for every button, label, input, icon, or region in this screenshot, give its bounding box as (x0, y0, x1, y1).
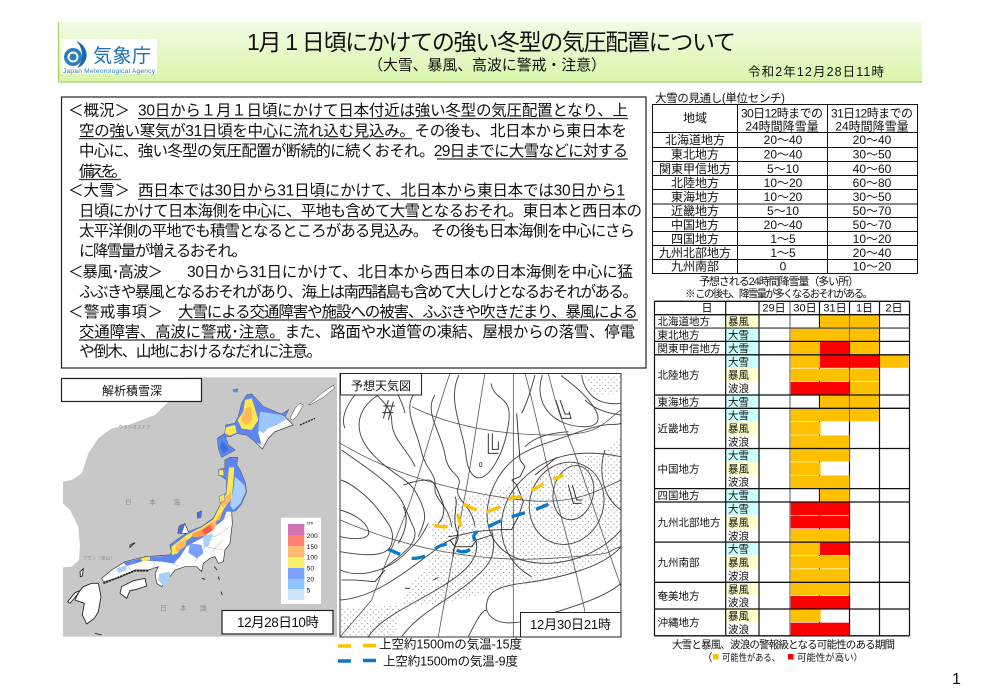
text block: overview: 備えを。 (79, 162, 127, 180)
warning type labels: 暴風 (728, 557, 749, 569)
table rows: 四国地方 (671, 231, 719, 246)
warning type labels: 暴風 (728, 517, 749, 529)
region labels: 奄美地方 (658, 590, 700, 602)
text block: warnings: ＜警戒事項＞ (68, 303, 163, 321)
table note: ※ この後も、降雪量が多くなるおそれがある。 (685, 287, 873, 300)
chart: coastlines (342, 413, 557, 588)
text block: warnings: や倒木、山地におけるなだれに注意。 (79, 342, 322, 360)
table rows: 北陸地方 (671, 175, 719, 190)
text block: heavy snow (68, 182, 642, 260)
map label: analysed snow depth: 解析積雪深 (102, 383, 162, 398)
map legend: 50 (307, 565, 314, 572)
region labels: 東海地方 (658, 395, 700, 408)
table header dates: 30日 (793, 302, 817, 314)
warning type labels: 大雪 (728, 449, 749, 462)
table rows: 近畿地方 (671, 203, 719, 218)
chart: isobars (340, 375, 621, 637)
table rows: 東海地方 (671, 189, 719, 204)
map: labels: 日本国 (160, 604, 207, 613)
warning type labels: 波浪 (728, 569, 749, 582)
warning type labels: 大雪 (728, 355, 749, 368)
title: 1月 1 日頃にかけての強い冬型の気圧配置について (247, 29, 736, 55)
table rows: 中国地方 (671, 217, 719, 232)
chart label: forecast weather map (340, 374, 422, 395)
panel: snowfall forecast table (652, 91, 918, 300)
map: continent (63, 377, 185, 482)
region labels: 東北地方 (658, 328, 700, 342)
table rows: 50～70 (853, 204, 892, 218)
table rows: 5～10 (767, 204, 799, 218)
warning type labels: 波浪 (728, 623, 749, 636)
date: 令和2年12月28日11時 (748, 65, 884, 79)
chart label: forecast weather map: 予想天気図 (351, 378, 411, 393)
warning type labels: 波浪 (728, 596, 749, 609)
header band (58, 22, 922, 82)
map: Shikoku and Kyushu (68, 543, 222, 635)
map legend: 5 (307, 587, 311, 594)
warning type labels: 大雪 (728, 543, 749, 556)
table rows: 60～80 (853, 176, 892, 190)
table rows: 5～10 (767, 162, 799, 176)
text block: heavy snow: 日頃にかけて日本海側を中心に、平地も含めて大雪となるおそれ。東日本と西日本の (79, 202, 642, 220)
table caption: 大雪と暴風、波浪の警報級となる可能性のある期間 (672, 638, 895, 651)
warning type labels: 大雪 (728, 502, 749, 516)
table note: 予想される24時間降雪量（多い所） (699, 274, 859, 288)
table rows: 1～5 (770, 246, 796, 260)
table rows: 50～70 (853, 218, 892, 232)
legend: -15 degree line: 上空約1500mの気温-15度 (379, 636, 522, 652)
table caption: 可能性が高い） (797, 652, 863, 664)
warning type labels: 大雪 (728, 342, 749, 355)
table header (683, 106, 913, 134)
warning type labels: 大雪 (728, 328, 749, 342)
table caption: （ (702, 652, 712, 664)
warning type labels: 暴風 (728, 316, 749, 328)
chart timestamp: 12月30日21時 (530, 617, 611, 632)
region labels: 四国地方 (658, 489, 700, 502)
table caption (672, 638, 895, 664)
map: Hokkaido (218, 385, 334, 457)
region labels: 近畿地方 (658, 422, 700, 435)
panel: snow depth map (62, 377, 337, 637)
chart timestamp (520, 612, 621, 637)
text block: heavy snow: に降雪量が増えるおそれ。 (79, 242, 247, 260)
text block: storm and high waves: 30日から31日にかけて、北日本から西日本の日本海側を中心に猛 (187, 263, 633, 281)
map legend: cm (307, 520, 313, 526)
warning type labels (728, 316, 749, 636)
text block: overview: 空の強い寒気が31日頃を中心に流れ込む見込み。その後も、北日本から東日本を (79, 122, 627, 140)
table header dates: 29日 (762, 302, 786, 314)
text block: overview: 30日から１月１日頃にかけて日本付近は強い冬型の気圧配置となり、上 (138, 102, 628, 120)
table header: 31日12時までの (831, 106, 913, 120)
warning type labels: 暴風 (728, 423, 749, 435)
map timestamp (222, 610, 333, 634)
map legend (281, 518, 321, 604)
text block: overview: 中心に、強い冬型の気圧配置が断続的に続くおそれ。29日までに大雪などに対する (79, 142, 628, 160)
map: labels: プサン（釜山） (82, 554, 115, 561)
warning type labels: 暴風 (728, 370, 749, 382)
map timestamp: 12月28日10時 (237, 615, 320, 630)
text block: heavy snow: 太平洋側の平地でも積雪となるところがある見込み。 その後も日本海側を中心にさら (79, 222, 635, 240)
warning type labels: 波浪 (728, 436, 749, 449)
map legend: 100 (307, 555, 318, 562)
map: labels: 日本海 (125, 498, 180, 507)
map label: analysed snow depth (62, 378, 202, 402)
region labels: 九州北部地方 (658, 516, 720, 529)
map legend: 150 (307, 544, 318, 551)
table rows: 20～40 (764, 148, 803, 162)
text block: storm and high waves: ＜暴風･高波＞ (68, 263, 163, 281)
map: Honshu (102, 457, 247, 587)
chart: -9C line blue (388, 504, 548, 558)
warning type labels: 暴風 (728, 584, 749, 596)
table rows: 九州南部 (671, 259, 719, 274)
table header dates (702, 302, 903, 314)
logo: Japan Meteorological Agency: Japan Meteorological Agency (63, 68, 156, 75)
table rows: 20～40 (853, 246, 892, 260)
logo: Japan Meteorological Agency: 気象庁 (93, 45, 151, 67)
table rows: 20～40 (764, 133, 803, 147)
text block: storm and high waves: ふぶきや暴風となるおそれがあり、海上は南西諸島も含めて大しけとなるおそれがある。 (79, 283, 638, 301)
table caption: 可能性がある、 (722, 652, 780, 664)
table rows (659, 132, 892, 274)
text block: storm and high waves (68, 263, 638, 301)
warning type labels: 大雪 (728, 409, 749, 422)
table header dates: 1日 (856, 302, 873, 314)
chart: graticule (340, 373, 621, 637)
region labels: 沖縄地方 (658, 616, 700, 629)
warning type labels: 暴風 (728, 463, 749, 475)
panel: forecast weather chart (340, 373, 621, 637)
table rows: 1～5 (770, 232, 796, 246)
warning type labels: 波浪 (728, 529, 749, 542)
table rows: 10～20 (764, 190, 803, 204)
warning type labels: 波浪 (728, 382, 749, 395)
warning type labels: 大雪 (728, 489, 749, 502)
panel: summary text (62, 97, 646, 368)
text block: warnings: 交通障害、高波に警戒･注意。また、路面や水道管の凍結、屋根からの落雪、停電 (79, 323, 635, 341)
subtitle: （大雪、暴風、高波に警戒・注意） (368, 57, 606, 74)
region labels (658, 315, 720, 629)
table rows: 30～50 (853, 148, 892, 162)
chart: -15C line orange (434, 475, 563, 527)
chart: stipple area (358, 438, 621, 637)
table rows: 東北地方 (671, 147, 719, 162)
map legend: 200 (307, 533, 318, 540)
table rows: 北海道地方 (665, 132, 725, 147)
logo: Japan Meteorological Agency (61, 39, 157, 75)
table header dates: 日 (702, 302, 712, 314)
table rows: 40～60 (853, 162, 892, 176)
text block: overview: ＜概況＞ (68, 102, 130, 120)
warning type labels: 暴風 (728, 610, 749, 622)
table rows: 関東甲信地方 (659, 161, 731, 176)
table rows: 10～20 (853, 260, 892, 274)
table rows: 10～20 (853, 232, 892, 246)
table heading: 大雪の見通し(単位センチ) (655, 91, 785, 105)
forecast period cells (791, 315, 908, 635)
region labels: 中国地方 (658, 462, 700, 475)
warning type cell backgrounds (726, 315, 759, 622)
warning type labels: 波浪 (728, 476, 749, 489)
map legend: 20 (307, 576, 314, 583)
table header dates: 31日 (823, 302, 847, 314)
table header dates: 2日 (885, 302, 903, 314)
table header: 30日12時までの (741, 106, 823, 120)
region labels: 九州南部 (658, 556, 700, 569)
table rows: 20～40 (764, 218, 803, 232)
map: labels: ウラジオストク (118, 424, 151, 431)
warning type labels: 大雪 (728, 396, 749, 408)
table rows: 0 (780, 260, 787, 274)
text block: warnings (68, 303, 638, 360)
table note (685, 274, 873, 300)
region labels: 北陸地方 (658, 369, 700, 382)
table header: 24時間降雪量 (745, 120, 819, 134)
table rows: 20～40 (853, 133, 892, 147)
table grid (652, 104, 918, 274)
page number: 1 (952, 671, 961, 688)
legend: -9 degree line: 上空約1500mの気温-9度 (383, 654, 518, 668)
table rows: 30～50 (853, 190, 892, 204)
table rows: 10～20 (764, 176, 803, 190)
table rows: 九州北部地方 (659, 245, 731, 260)
region labels: 関東甲信地方 (658, 342, 720, 355)
text block: warnings: 大雪による交通障害や施設への被害、ふぶきや吹きだまり、暴風による (178, 303, 638, 321)
table header: 地域 (683, 111, 707, 125)
text block: heavy snow: ＜大雪＞ (68, 182, 130, 200)
panel: warning period table (654, 301, 910, 664)
text block: heavy snow: 西日本では30日から31日頃にかけて、北日本から東日本では30日から1 (138, 182, 625, 200)
map: labels (82, 424, 207, 613)
table header: 24時間降雪量 (835, 120, 909, 134)
text block: overview (68, 102, 628, 180)
region labels: 北海道地方 (658, 315, 710, 328)
chart: low pressure marks (382, 400, 582, 503)
